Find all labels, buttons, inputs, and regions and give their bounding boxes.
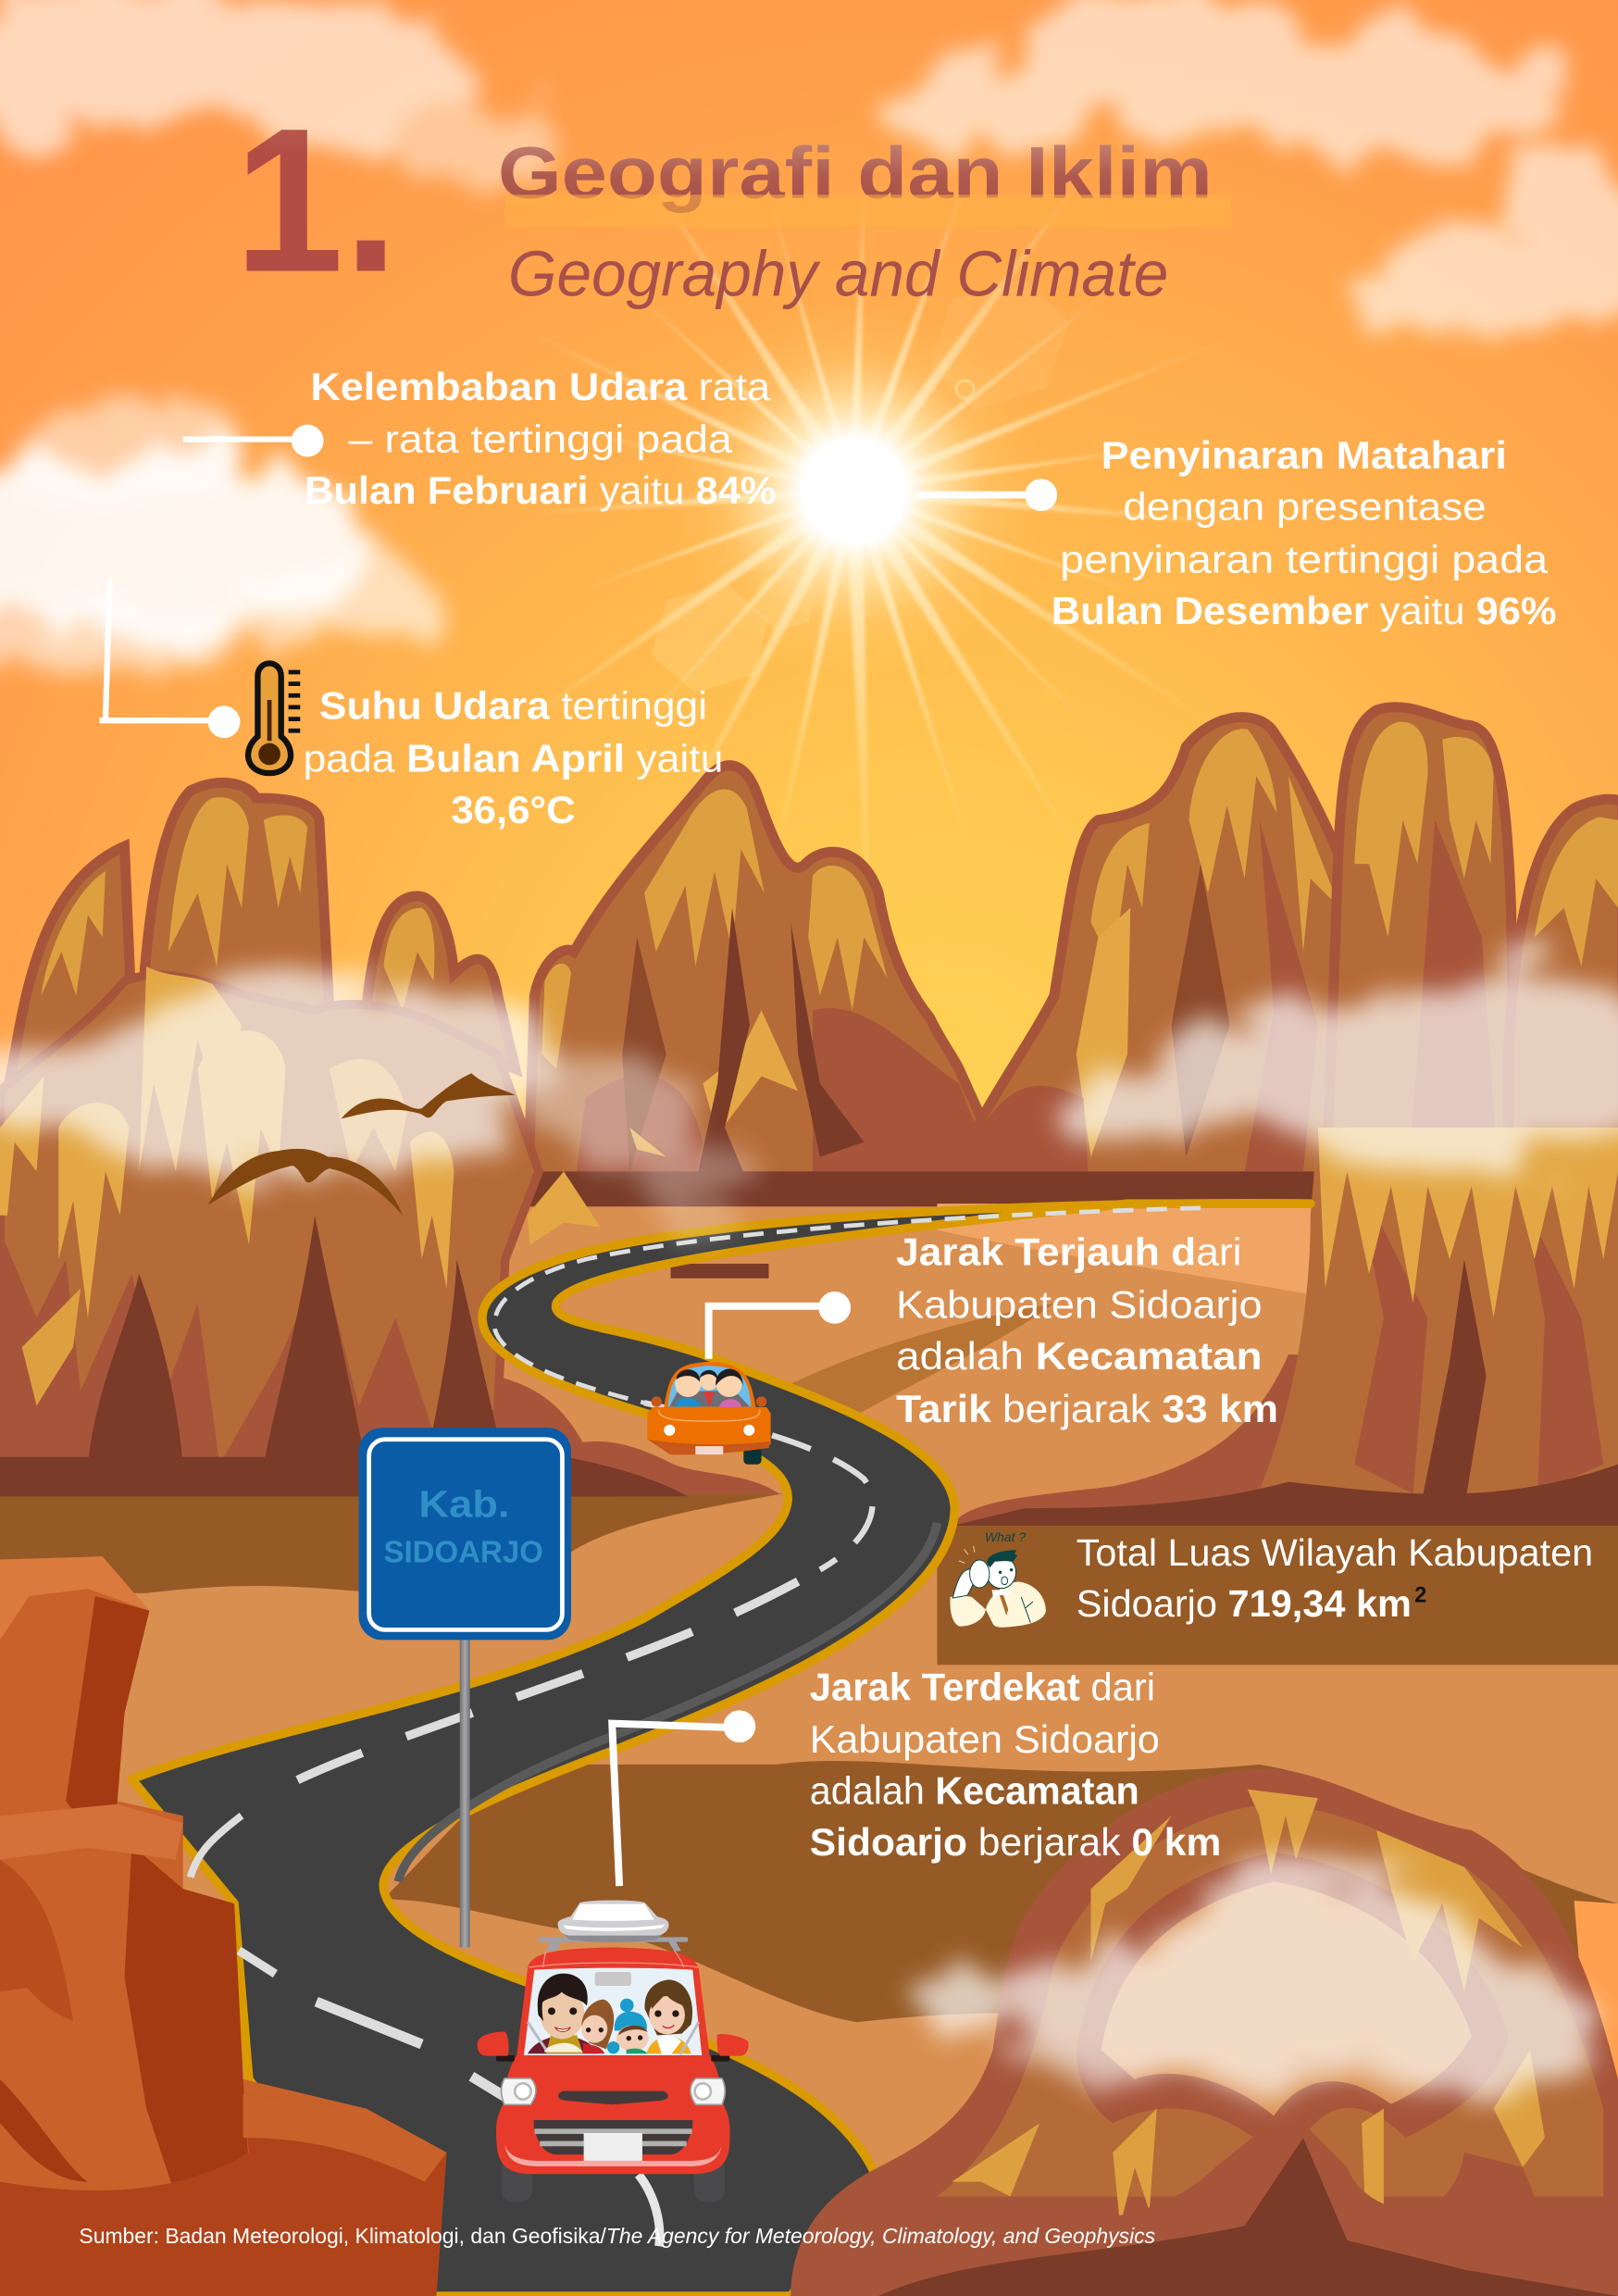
cloud: top left	[0, 0, 556, 181]
callout: farthest distance: adalah Kecamatan	[896, 1334, 1263, 1378]
bird: lower	[208, 1149, 403, 1216]
callout: sunshine: Bulan Desember yaitu 96%	[1052, 589, 1557, 632]
road sign: Kab. Sidoarjo: SIDOARJO	[383, 1536, 543, 1570]
winding road	[131, 1204, 1311, 2296]
English heading: Geography and Climate	[508, 237, 1168, 309]
callout: farthest distance	[709, 1230, 1278, 1430]
ground: sand and dunes	[0, 1171, 1618, 2296]
rock arch foreground	[790, 1768, 1618, 2296]
tires	[502, 2157, 725, 2202]
source note: Sumber: Badan Meteorologi, Klimatologi, dan Geofisika/The Agency for Meteorology, Climatology, and Geophysics	[79, 2224, 1155, 2248]
sun with rays	[490, 131, 1292, 1017]
rock tip over road	[498, 1377, 779, 1496]
cloud: top right	[878, 0, 1618, 332]
callout: total area: Total Luas Wilayah Kabupaten	[1077, 1531, 1593, 1574]
fog: rock arch	[908, 1871, 1596, 2091]
callout: temperature	[100, 579, 723, 831]
title block	[234, 86, 1231, 315]
man	[528, 2035, 599, 2053]
road sign: Kab. Sidoarjo: Kab.	[418, 1483, 510, 1526]
mirrors	[478, 2031, 749, 2062]
roof box	[539, 1901, 688, 1951]
callout: farthest distance: Jarak Terjauh d ari	[896, 1230, 1241, 1274]
callout: nearest distance	[612, 1665, 1221, 1886]
icon: man asking what	[950, 1529, 1046, 1628]
bird: upper	[342, 1073, 516, 1118]
red rock pillar foreground	[0, 1556, 446, 2296]
cloud: left	[0, 395, 454, 674]
callout: sunshine: penyinaran tertinggi pada	[1060, 537, 1549, 580]
callout: nearest distance: Jarak Terdekat dari	[810, 1665, 1155, 1708]
passengers	[528, 1974, 699, 2054]
Indonesian heading: Geografi dan Iklim	[498, 131, 1213, 214]
car body	[496, 1947, 730, 2174]
left cliff	[0, 967, 666, 1496]
right cliff	[952, 1128, 1618, 1526]
callout: sunshine: Penyinaran Matahari	[1101, 433, 1507, 477]
front grille	[504, 2091, 722, 2166]
callout: sunshine	[916, 433, 1557, 632]
callout: nearest distance: adalah Kecamatan	[810, 1769, 1139, 1813]
icon: man asking what: What ?	[985, 1529, 1026, 1544]
callout: temperature: 36,6°C	[451, 788, 576, 831]
back mountains: left peaks	[0, 782, 516, 1128]
number: 1.	[234, 86, 398, 315]
windshield	[524, 1968, 702, 2055]
fog: left mountains	[0, 977, 762, 1243]
headlights	[502, 2078, 725, 2104]
callout: humidity: Kelembaban Udara rata	[310, 365, 771, 408]
back mountains: right peaks	[937, 707, 1618, 1216]
callout: humidity: Bulan Februari yaitu 84%	[305, 468, 776, 512]
woman	[645, 1979, 692, 2035]
callout: nearest distance: Sidoarjo berjarak 0 km	[810, 1820, 1221, 1864]
callout: sunshine: dengan presentase	[1123, 484, 1487, 528]
callout: total area	[950, 1529, 1593, 1628]
callout: nearest distance: Kabupaten Sidoarjo	[810, 1717, 1160, 1761]
road sign: Kab. Sidoarjo	[359, 1428, 571, 1948]
callout: total area: Sidoarjo 719,34 km	[1077, 1582, 1412, 1625]
hood line and body covers	[514, 2055, 712, 2077]
callout: farthest distance: Kabupaten Sidoarjo	[896, 1282, 1263, 1326]
red family car (near)	[478, 1901, 749, 2202]
fog: right mountains	[1062, 967, 1618, 1166]
back mountains: center	[527, 766, 1025, 1216]
icon: thermometer	[248, 663, 300, 773]
callout: farthest distance: Tarik berjarak 33 km	[896, 1387, 1278, 1430]
girl	[581, 2000, 614, 2049]
orange car (far)	[647, 1362, 771, 1465]
callout: temperature: pada Bulan April yaitu	[303, 737, 723, 780]
callout: humidity	[183, 365, 776, 512]
callout: temperature: Suhu Udara tertinggi	[319, 684, 707, 728]
child with blue hat	[620, 1999, 634, 2012]
callout: humidity: – rata tertinggi pada	[348, 418, 733, 461]
callout: total area: 2	[1414, 1583, 1426, 1607]
birds	[208, 1073, 516, 1216]
